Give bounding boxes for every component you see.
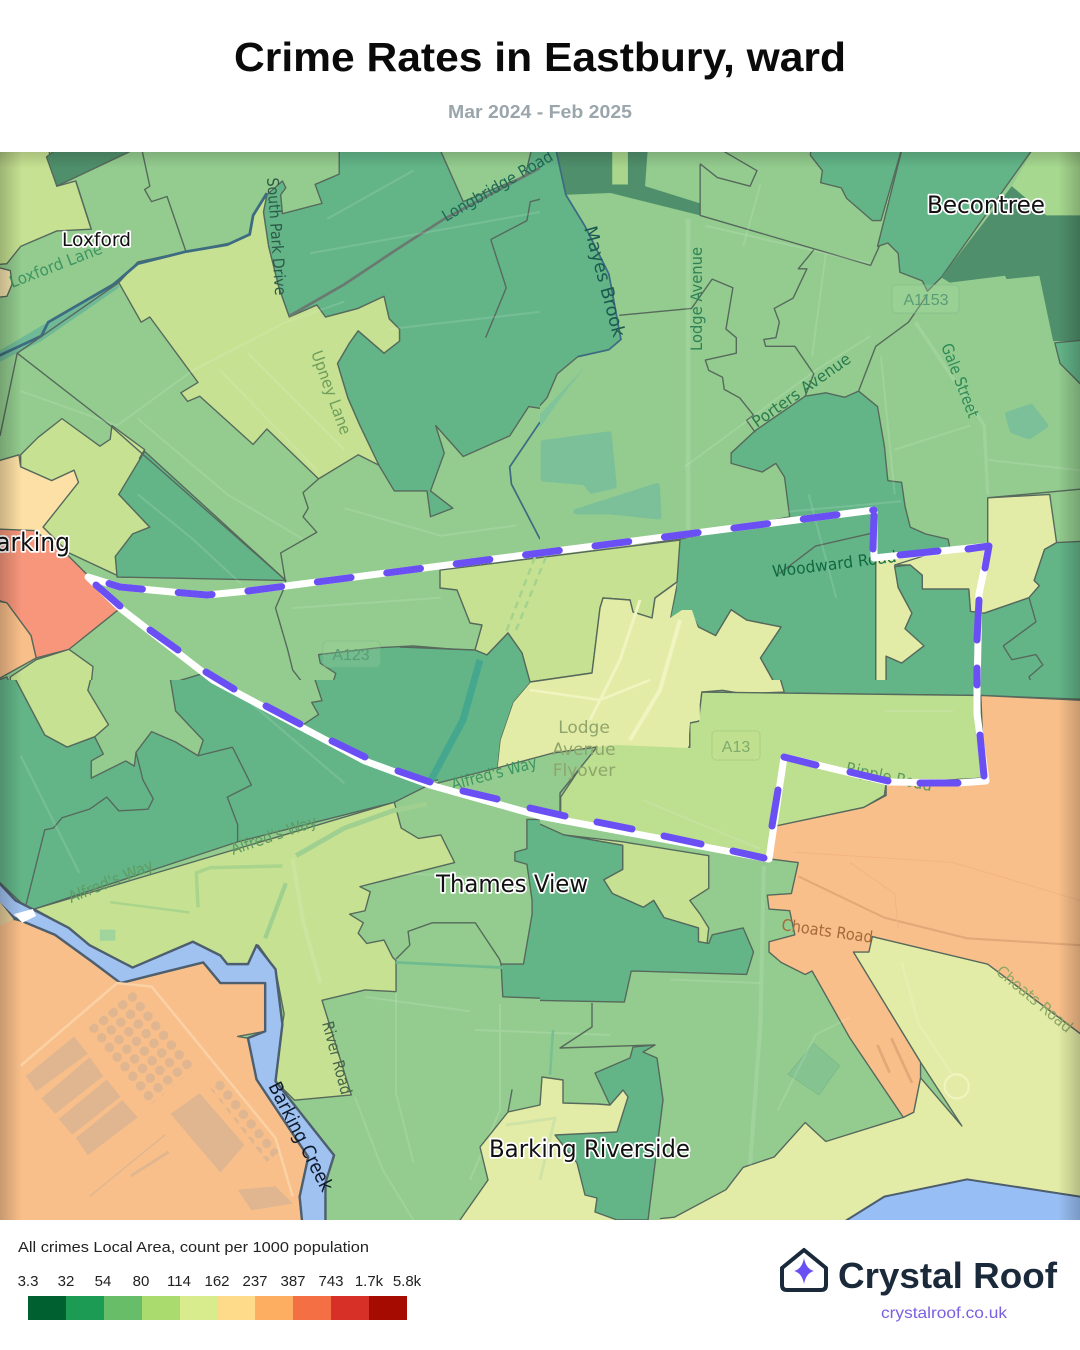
map quadrant: north east <box>540 152 1080 680</box>
legend scale labels: 5.8k <box>393 1273 422 1290</box>
legend scale labels: 54 <box>95 1273 111 1290</box>
road label: River Road: River Road <box>318 1019 356 1096</box>
legend scale labels: 387 <box>280 1273 306 1290</box>
legend scale labels: 162 <box>204 1273 230 1290</box>
map patch: Lodge Avenue centre wards <box>400 540 700 820</box>
road label: Gale Street: Gale Street <box>937 341 983 420</box>
road label: Alfred's Way east: Alfred's Way <box>449 753 539 794</box>
road shield: A13: A13 <box>722 739 750 756</box>
road label: Porters Avenue: Porters Avenue <box>748 349 854 431</box>
road shield: A13 <box>712 731 760 760</box>
road label: Loxford Lane: Loxford Lane <box>7 239 105 292</box>
legend scale labels: 743 <box>318 1273 344 1290</box>
place label: Lodge Avenue Flyover: Avenue <box>552 740 616 760</box>
road label: Lodge Avenue: Lodge Avenue <box>687 247 706 351</box>
place label: Loxford: Loxford <box>62 229 131 251</box>
road shield: A1153 <box>892 285 959 313</box>
road label: Woodward Road: Woodward Road <box>771 547 898 581</box>
road shield: A123 <box>323 641 380 667</box>
place label: Lodge Avenue Flyover: Flyover <box>553 761 615 781</box>
road shield: A123: A123 <box>332 647 370 664</box>
place label: Lodge Avenue Flyover <box>552 718 616 781</box>
map edge shadow <box>0 152 1080 1220</box>
road label: Mayes Brook: Mayes Brook <box>579 224 629 340</box>
legend scale labels: 237 <box>242 1273 268 1290</box>
road labels <box>7 147 1077 1195</box>
legend title: All crimes Local Area, count per 1000 population <box>18 1239 369 1256</box>
legend scale labels: 3.3 <box>18 1273 38 1290</box>
legend scale labels: 1.7k <box>355 1273 384 1290</box>
legend scale labels <box>18 1273 422 1290</box>
map quadrant: north west <box>0 152 540 680</box>
place label: Thames View: Thames View <box>435 870 588 898</box>
road label: Alfred's Way west: Alfred's Way <box>65 855 156 907</box>
brand name: Crystal Roof <box>838 1255 1058 1296</box>
legend scale labels: 114 <box>167 1273 191 1290</box>
legend scale labels: 80 <box>133 1273 149 1290</box>
brand url: crystalroof.co.uk <box>881 1305 1008 1322</box>
map quadrant: south west <box>0 680 540 1220</box>
road label: Ripple Road: Ripple Road <box>844 758 934 795</box>
footer panel <box>0 1220 1080 1350</box>
road label: Upney Lane: Upney Lane <box>307 348 355 437</box>
map patch: Barking Riverside wards <box>460 1003 663 1220</box>
legend colour swatches <box>28 1296 407 1320</box>
place label: Lodge Avenue Flyover: Lodge <box>558 718 610 738</box>
subtitle: Mar 2024 - Feb 2025 <box>448 102 632 122</box>
road label: Barking Creek: Barking Creek <box>264 1078 338 1195</box>
road label: South Park Drive: South Park Drive <box>263 177 290 296</box>
icon: crystal roof house logo <box>782 1250 826 1290</box>
title: Crime Rates in Eastbury, ward <box>234 34 846 80</box>
road label: Choats Road west: Choats Road <box>780 915 874 947</box>
road label: Choats Road east: Choats Road <box>992 962 1077 1036</box>
road label: Longbridge Road: Longbridge Road <box>438 147 556 225</box>
legend scale labels: 32 <box>58 1273 74 1290</box>
ward boundary: Eastbury dashed outline <box>88 510 989 859</box>
header panel <box>0 0 1080 152</box>
place label: Barking Riverside: Barking Riverside <box>489 1135 690 1163</box>
road label: Alfred's Way centre: Alfred's Way <box>228 812 319 859</box>
place label: Becontree: Becontree <box>927 191 1045 219</box>
map quadrant: south east <box>540 680 1080 1220</box>
road shield: A1153: A1153 <box>903 292 949 309</box>
